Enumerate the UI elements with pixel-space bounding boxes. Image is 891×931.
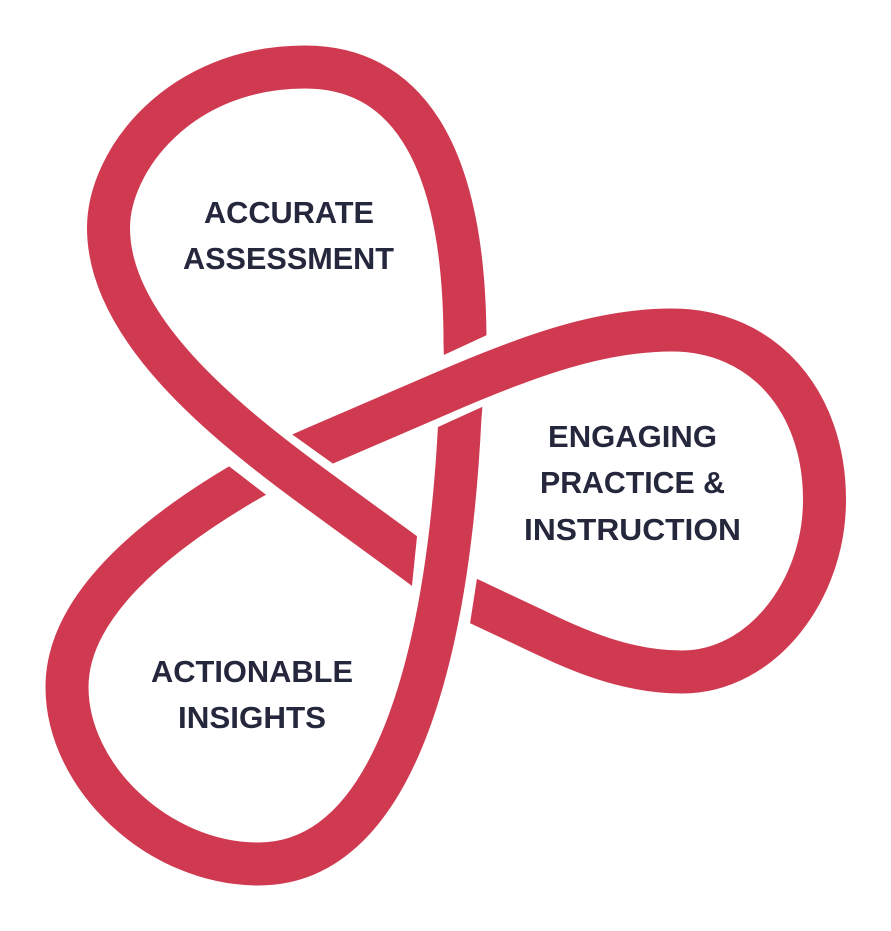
- label: engaging practice and instruction: ENGAGING: [548, 420, 717, 454]
- label: engaging practice and instruction: INSTRUCTION: [524, 513, 741, 547]
- label: actionable insights: ACTIONABLE: [151, 655, 353, 689]
- label: accurate assessment: ASSESSMENT: [183, 242, 394, 276]
- label: engaging practice and instruction: PRACTICE &: [540, 466, 725, 500]
- label: engaging practice and instruction: [524, 420, 741, 547]
- label: accurate assessment: [183, 196, 394, 276]
- knot: three interlocking loops: [67, 67, 824, 864]
- loop: right: [290, 330, 824, 672]
- loop: bottom left: [67, 392, 462, 864]
- label: actionable insights: [151, 655, 353, 735]
- label: actionable insights: INSIGHTS: [178, 701, 326, 735]
- label: accurate assessment: ACCURATE: [204, 196, 374, 230]
- loop: top: [108, 67, 466, 580]
